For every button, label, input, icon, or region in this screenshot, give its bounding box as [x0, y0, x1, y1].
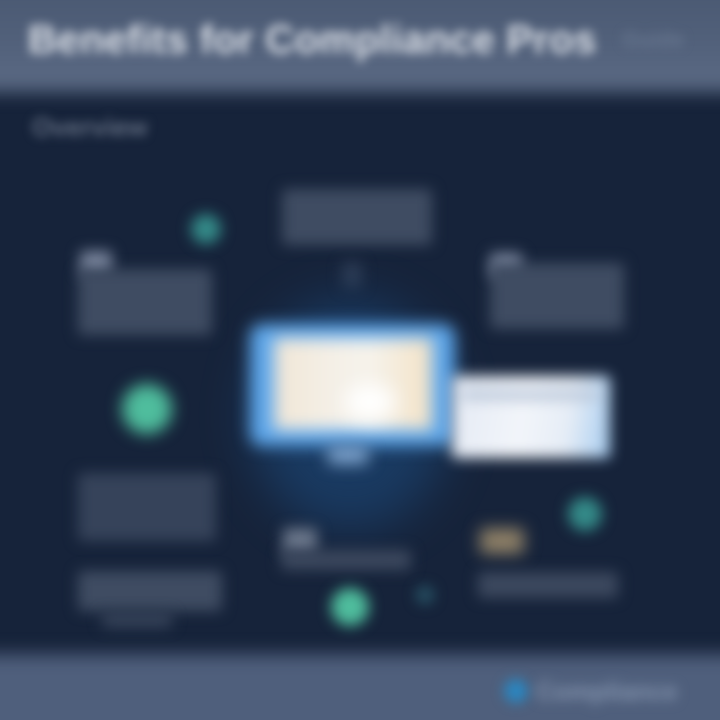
- footer band: [0, 654, 720, 720]
- panel: right light card: [452, 376, 610, 458]
- top centre text lines: [282, 189, 432, 245]
- upper left text lines: [78, 269, 212, 335]
- upper right text lines: [490, 263, 624, 329]
- connector: top centre to screen: [342, 262, 362, 288]
- footer logo: [498, 674, 678, 708]
- icon: top teal dot: [191, 214, 221, 244]
- header band: [0, 0, 720, 92]
- monitor stand: [328, 446, 368, 464]
- lower centre text lines: [281, 550, 411, 570]
- icon: left green circle: [122, 384, 172, 434]
- lower centre icon: [283, 528, 317, 554]
- lower left text block two: [78, 571, 222, 611]
- header right note: Guide: [622, 27, 684, 52]
- footer logo text: Compliance: [536, 678, 678, 706]
- icon: bottom green circle: [331, 588, 369, 626]
- icon: right teal square: [568, 497, 602, 531]
- icon: orange badge: [480, 528, 524, 554]
- glow behind centre screen: [250, 300, 450, 530]
- monitor screen: [274, 338, 432, 430]
- upper left icon: [80, 251, 112, 275]
- panel: lower left text: [72, 468, 228, 632]
- right card text band: [462, 390, 600, 400]
- lower left text block one: [78, 473, 216, 541]
- lower left caption: [102, 613, 172, 627]
- section label: Overview: [32, 112, 148, 142]
- icon: small teal dot: [415, 585, 435, 605]
- panel: lower right text: [478, 572, 618, 598]
- panel: lower centre text: [274, 520, 416, 575]
- title: Benefits for Compliance Pros: [28, 18, 597, 62]
- panel: upper right text: [480, 244, 630, 334]
- central monitor: [250, 324, 455, 446]
- panel: top centre text: [276, 184, 438, 250]
- panel: upper left text: [70, 242, 218, 340]
- monitor highlight: [345, 385, 395, 419]
- upper right icon: [490, 253, 522, 277]
- footer logo mark: [504, 679, 528, 703]
